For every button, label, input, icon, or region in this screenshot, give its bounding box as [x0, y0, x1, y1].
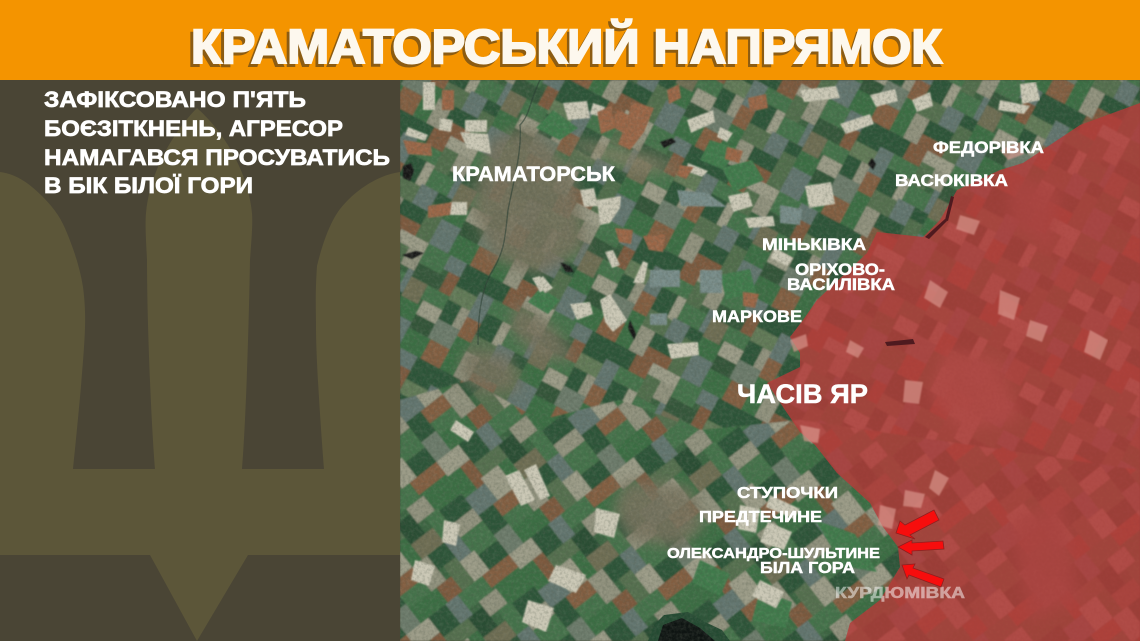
map: field mosaic	[400, 80, 1140, 641]
map: urban and bare ground areas	[462, 125, 1080, 620]
label: Kramatorsk: КРАМАТОРСЬК	[452, 163, 615, 186]
map: river	[478, 80, 540, 345]
panel: satellite map	[400, 80, 1140, 641]
label: Chasiv Yar: ЧАСІВ ЯР	[737, 379, 868, 409]
title: КРАМАТОРСЬКИЙ НАПРЯМОК	[188, 22, 941, 77]
panel: left background	[0, 80, 400, 641]
text block: summary: В БІК БІЛОЇ ГОРИ	[44, 173, 253, 198]
label: Markove: МАРКОВЕ	[712, 307, 802, 326]
map: bright green fields	[528, 110, 877, 628]
map: brown ploughed fields	[403, 84, 768, 308]
text block: summary: БОЄЗІТКНЕНЬ, АГРЕСОР	[44, 116, 343, 141]
icon: trident emblem	[0, 108, 400, 641]
map labels	[452, 138, 1044, 602]
header bar	[0, 0, 1140, 80]
label: Kurdiumivka: КУРДЮМІВКА	[835, 585, 966, 602]
text block: summary: ЗАФІКСОВАНО П'ЯТЬ	[44, 87, 306, 112]
label: Bila Hora: БІЛА ГОРА	[760, 560, 855, 577]
map: pale harvested fields	[405, 82, 1040, 632]
red zone: gullies	[885, 196, 954, 346]
arrow: upper	[896, 510, 939, 539]
red zone: pale fields	[790, 142, 1108, 529]
map: darkening veil	[400, 80, 1140, 641]
arrows: attack directions	[896, 510, 944, 587]
label: Oleksandro-Shultyne: ОЛЕКСАНДРО-ШУЛЬТИНЕ	[667, 545, 880, 562]
map: dark water and gullies	[402, 138, 876, 340]
text block: summary	[44, 87, 390, 198]
arrow: middle	[898, 540, 944, 555]
map: texture	[400, 80, 1140, 641]
label: Vasiukivka: ВАСЮКІВКА	[895, 171, 1008, 190]
text block: summary: НАМАГАВСЯ ПРОСУВАТИСЬ	[44, 145, 390, 170]
map: lake	[648, 612, 730, 641]
label: Minkivka: МІНЬКІВКА	[762, 235, 866, 254]
label: Orikhovo-Vasylivka: ОРІХОВО-	[795, 260, 885, 279]
map: farm fields	[402, 82, 1040, 632]
label: Orikhovo-Vasylivka: ВАСИЛІВКА	[787, 275, 895, 294]
map: red occupied zone	[767, 103, 1140, 641]
label: Orikhovo-Vasylivka	[787, 260, 895, 294]
title: КРАМАТОРСЬКИЙ НАПРЯМОК	[191, 19, 943, 74]
arrow: lower	[902, 564, 944, 587]
map: grey-blue fields	[650, 190, 802, 325]
label: Stupochky: СТУПОЧКИ	[737, 485, 838, 502]
label: Predtechyne: ПРЕДТЕЧИНЕ	[699, 509, 822, 526]
label: Fedorivka: ФЕДОРІВКА	[933, 138, 1044, 157]
